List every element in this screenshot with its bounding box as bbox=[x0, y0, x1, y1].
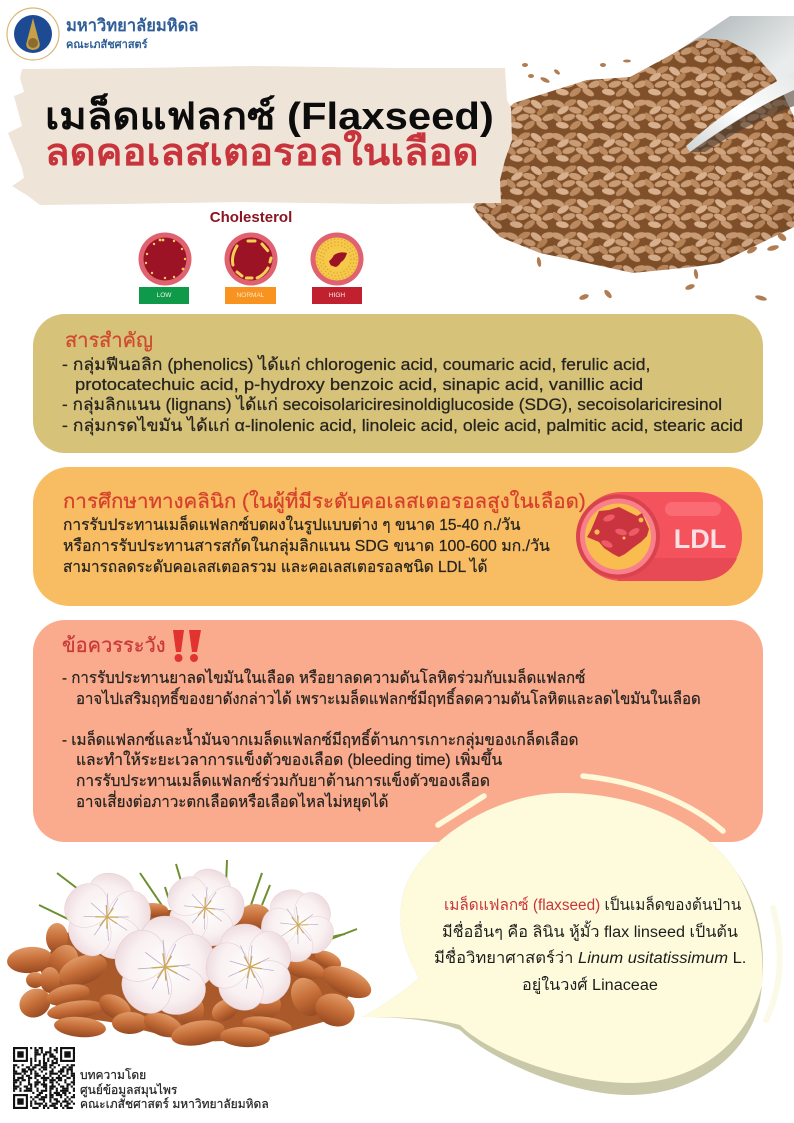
icon: double exclamation marks bbox=[173, 630, 201, 662]
faculty name: คณะเภสัชศาสตร์ bbox=[66, 39, 148, 51]
bubble highlights bbox=[438, 776, 723, 831]
label: normal bbox=[225, 287, 276, 304]
cholesterol heading: Cholesterol bbox=[210, 209, 292, 226]
bubble text: มีชื่อวิทยาศาสตร์ว่า Linum usitatissimum L. bbox=[434, 950, 746, 967]
image: flaxseed pile with metal scoop bbox=[473, 16, 794, 301]
compounds list: - กลุ่มกรดไขมัน ได้แก่ α-linolenic acid, linoleic acid, oleic acid, palmitic acid, stearic acid bbox=[62, 417, 743, 435]
precautions text: และทำให้ระยะเวลาการแข็งตัวของเลือด (bleeding time) เพิ่มขึ้น bbox=[76, 752, 502, 769]
title line 2: ลดคอเลสเตอรอลในเลือด bbox=[45, 132, 479, 174]
bubble body bbox=[362, 793, 763, 1083]
precautions text: อาจเสี่ยงต่อภาวะตกเลือดหรือเลือดไหลไม่หยุดได้ bbox=[76, 794, 388, 811]
university name: มหาวิทยาลัยมหิดล bbox=[66, 17, 198, 35]
artery: normal bbox=[224, 232, 278, 286]
icon: university seal bbox=[6, 7, 60, 61]
clinical studies text: การรับประทานเมล็ดแฟลกซ์บดผงในรูปแบบต่าง ๆ ขนาด 15-40 ก./วัน bbox=[63, 517, 520, 534]
precautions text: อาจไปเสริมฤทธิ์ของยาดังกล่าวได้ เพราะเมล็ดแฟลกซ์มีฤทธิ์ลดความดันโลหิตและลดไขมันในเลือด bbox=[76, 691, 701, 708]
label: low bbox=[139, 287, 189, 304]
bubble text: เมล็ดแฟลกซ์ (flaxseed) เป็นเมล็ดของต้นป่าน bbox=[444, 897, 741, 914]
seed mound bbox=[40, 910, 350, 1042]
title banner bbox=[8, 66, 512, 205]
scattered seeds bbox=[522, 60, 788, 302]
pile shading bbox=[473, 38, 794, 273]
heading: precautions: ข้อควรระวัง bbox=[62, 635, 166, 657]
label: low: LOW bbox=[157, 292, 171, 299]
speech bubble bbox=[362, 773, 783, 1095]
title line 1: เมล็ดแฟลกซ์ (Flaxseed) bbox=[45, 96, 494, 138]
bubble text: อยู่ในวงศ์ Linaceae bbox=[522, 977, 658, 994]
scoop front edge bbox=[686, 72, 794, 152]
banner brush stroke bbox=[8, 66, 512, 205]
artery: low bbox=[138, 232, 192, 286]
artery: high bbox=[310, 232, 364, 286]
compounds list: - กลุ่มลิกแนน (lignans) ได้แก่ secoisolariciresinoldiglucoside (SDG), secoisolariciresinol bbox=[62, 396, 722, 414]
logo: Mahidol University seal and name bbox=[6, 7, 198, 61]
clinical studies text: สามารถลดระดับคอเลสเตอลรวม และคอเลสเตอรอลชนิด LDL ได้ bbox=[63, 559, 487, 576]
panel: clinical studies bbox=[33, 467, 763, 606]
cholesterol level diagram bbox=[138, 209, 364, 304]
credit text: บทความโดย bbox=[80, 1068, 146, 1082]
compounds list: - กลุ่มฟีนอลิก (phenolics) ได้แก่ chlorogenic acid, coumaric acid, ferulic acid, bbox=[62, 356, 650, 374]
illustration: flax seeds and flowers bbox=[7, 860, 372, 1048]
QR code bbox=[13, 1047, 75, 1109]
panel: precautions bbox=[33, 620, 763, 842]
clinical studies text bbox=[63, 515, 550, 576]
credit text: ศูนย์ข้อมูลสมุนไพร bbox=[80, 1083, 177, 1097]
compounds list bbox=[62, 354, 743, 436]
heading: clinical studies: การศึกษาทางคลินิก (ในผู้ที่มีระดับคอเลสเตอรอลสูงในเลือด) bbox=[63, 491, 586, 513]
precautions text: การรับประทานเมล็ดแฟลกซ์ร่วมกับยาต้านการแข็งตัวของเลือด bbox=[76, 773, 490, 790]
label: high bbox=[312, 287, 362, 304]
precautions text: - การรับประทานยาลดไขมันในเลือด หรือยาลดความดันโลหิตร่วมกับเมล็ดแฟลกซ์ bbox=[62, 670, 585, 687]
scoop back wall bbox=[625, 16, 794, 90]
precautions text bbox=[62, 668, 701, 812]
panel: key compounds bbox=[33, 314, 763, 453]
seed pile bbox=[473, 38, 794, 273]
label: normal: NORMAL bbox=[237, 292, 264, 299]
bubble shape bbox=[362, 773, 783, 1095]
precautions text: - เมล็ดแฟลกซ์และน้ำมันจากเมล็ดแฟลกซ์มีฤทธิ์ต้านการเกาะกลุ่มของเกล็ดเลือด bbox=[62, 732, 578, 749]
flowers bbox=[47, 862, 165, 978]
clinical studies text: หรือการรับประทานสารสกัดในกลุ่มลิกแนน SDG ขนาด 100-600 มก./วัน bbox=[63, 538, 550, 555]
label: high: HIGH bbox=[329, 292, 345, 299]
bubble text bbox=[434, 896, 746, 994]
compounds list: protocatechuic acid, p-hydroxy benzoic acid, sinapic acid, vanillic acid bbox=[75, 376, 643, 394]
bubble text: มีชื่ออื่นๆ คือ ลินิน หู้มั้ว flax linseed เป็นต้น bbox=[442, 924, 738, 941]
icon: LDL artery capsule: LDL bbox=[674, 524, 726, 554]
icon: LDL artery capsule bbox=[576, 492, 742, 581]
credit text bbox=[80, 1068, 269, 1111]
seeds bbox=[6, 903, 376, 1050]
leaves bbox=[39, 860, 357, 939]
bubble shadow bbox=[362, 793, 763, 1095]
credit text: คณะเภสัชศาสตร์ มหาวิทยาลัยมหิดล bbox=[80, 1097, 269, 1111]
heading: key compounds: สารสำคัญ bbox=[65, 330, 153, 352]
